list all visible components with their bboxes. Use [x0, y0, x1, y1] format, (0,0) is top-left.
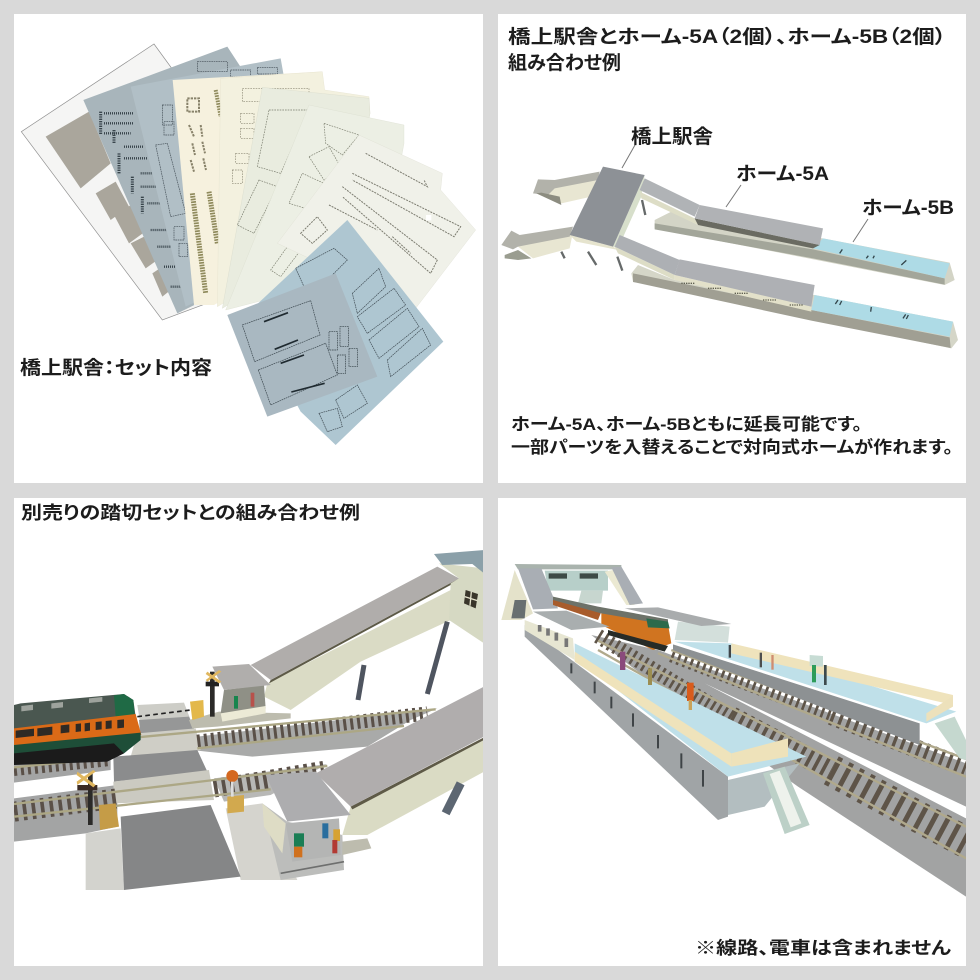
track rails	[598, 641, 966, 858]
caption: set contents: 橋上駅舎：セット内容	[20, 357, 212, 379]
station and platforms diagram	[501, 167, 958, 348]
note: extendable platforms	[511, 414, 953, 457]
note: extendable platforms: ホーム-5A、ホーム-5Bともに延長可能です。	[511, 414, 862, 434]
stair and roof, upper	[640, 178, 823, 248]
lower stair	[316, 687, 484, 835]
passengers	[620, 652, 694, 710]
lower shelter	[262, 772, 371, 880]
stair and roof, lower	[615, 235, 815, 312]
main bridge roof	[570, 167, 645, 247]
upper station building	[434, 550, 484, 643]
fan of parts sheets	[21, 44, 476, 445]
heading: combination example: 橋上駅舎とホーム-5A（2個）、ホーム-5B（2個）	[508, 26, 946, 48]
note: not included: ※線路、電車は含まれません	[695, 938, 951, 958]
track rails	[14, 709, 436, 817]
label: bridge station: 橋上駅舎	[631, 126, 714, 148]
ballast	[14, 708, 437, 842]
bridge structure	[501, 564, 643, 620]
lower platform	[631, 265, 958, 348]
far platform	[673, 642, 966, 760]
panel: level crossing combination	[14, 498, 484, 966]
pillars	[561, 200, 645, 271]
heading: combination example	[508, 26, 946, 74]
heading: combination example: 組み合わせ例	[508, 52, 621, 74]
track ties	[14, 713, 427, 812]
upper left walkway	[533, 172, 600, 205]
signal, lower	[77, 770, 244, 830]
panel: set contents	[14, 14, 483, 483]
note: extendable platforms: 一部パーツを入替えることで対向式ホームが作れます。	[511, 437, 953, 457]
crossing barrier	[137, 710, 191, 717]
panel: combination diagram	[498, 14, 966, 483]
station layout photo	[501, 564, 966, 897]
near platform surface	[575, 643, 806, 777]
leader lines	[622, 145, 868, 242]
upper platform	[655, 212, 955, 285]
upper shelter	[189, 664, 291, 728]
label: platform 5B: ホーム-5B	[862, 198, 954, 219]
train	[14, 694, 141, 765]
ballast tracks	[591, 635, 966, 897]
near building	[525, 620, 575, 660]
upper station stair	[251, 567, 459, 710]
panel: full station layout	[498, 498, 966, 966]
label: platform 5A: ホーム-5A	[736, 164, 829, 185]
track ties	[598, 636, 966, 842]
train	[553, 597, 671, 652]
ladder	[763, 767, 810, 834]
lower left walkway	[501, 227, 573, 260]
signal, upper	[190, 670, 221, 720]
far platform roof	[625, 607, 731, 643]
heading: level crossing: 別売りの踏切セットとの組み合わせ例	[21, 503, 360, 523]
level crossing photo	[14, 550, 484, 890]
crossing roads	[86, 703, 297, 890]
near platform roof	[533, 611, 610, 630]
near platform wall	[525, 625, 800, 820]
bridge side wall	[613, 175, 645, 248]
